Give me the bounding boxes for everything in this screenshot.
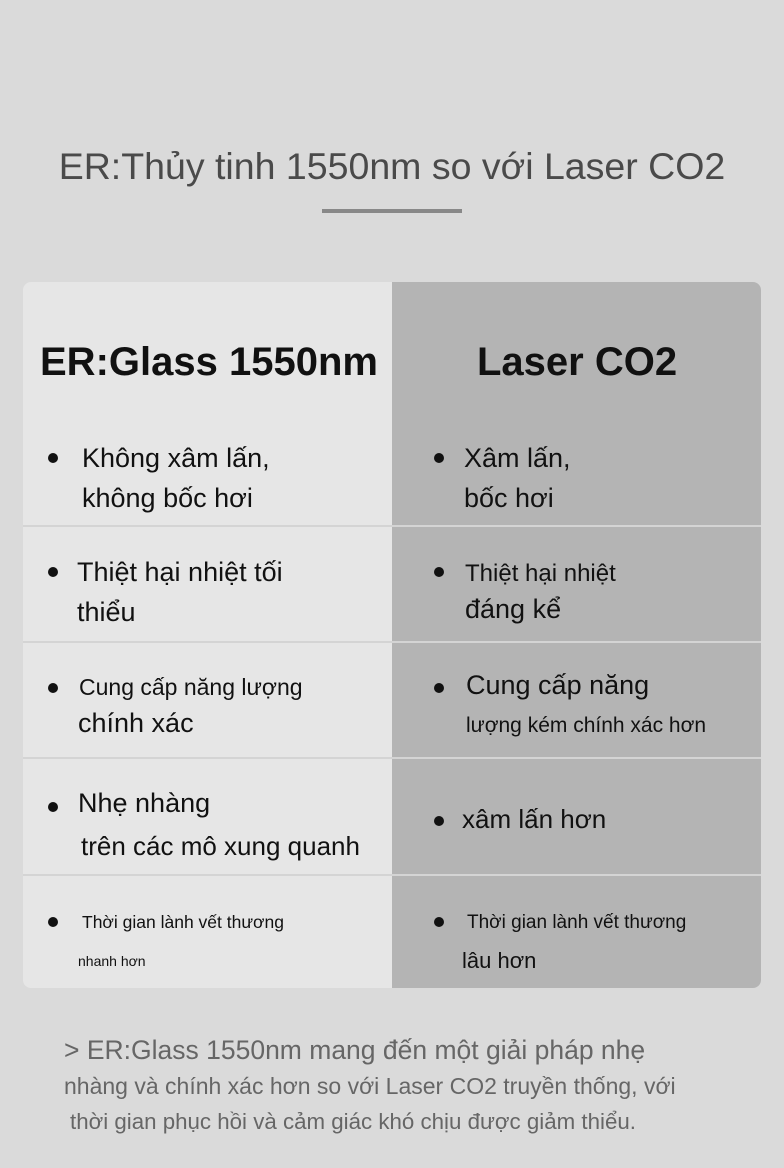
row 5 right: Thời gian lành vết thương: [467, 912, 686, 933]
title underline: [322, 209, 462, 213]
row 4 right: xâm lấn hơn: [462, 804, 606, 834]
header: Laser CO2: Laser CO2: [477, 340, 677, 384]
row 1 right: Xâm lấn,: [464, 443, 571, 473]
footer note: > ER:Glass 1550nm mang đến một giải pháp nhẹ: [64, 1035, 645, 1065]
row 2 right: đáng kể: [465, 594, 561, 624]
row 2 left: Thiệt hại nhiệt tối: [77, 557, 283, 587]
footer note: [64, 1035, 676, 1134]
title: ER:Thủy tinh 1550nm so với Laser CO2: [59, 145, 725, 187]
row 3 right: [434, 670, 706, 737]
row 3 right: lượng kém chính xác hơn: [466, 714, 706, 737]
row 2 left: thiểu: [77, 597, 136, 627]
row 1 left: [48, 443, 270, 513]
row 1 left: không bốc hơi: [82, 483, 253, 513]
row 3 left: Cung cấp năng lượng: [79, 674, 303, 700]
footer note: thời gian phục hồi và cảm giác khó chịu được giảm thiểu.: [70, 1109, 636, 1134]
row 4 left: [48, 788, 360, 861]
row 5 right: lâu hơn: [462, 948, 536, 973]
row 5 left: nhanh hơn: [78, 953, 146, 969]
row 2 right: Thiệt hại nhiệt: [465, 560, 616, 587]
row 4 left: trên các mô xung quanh: [81, 831, 360, 861]
row 3 left: chính xác: [78, 708, 194, 738]
footer note: nhàng và chính xác hơn so với Laser CO2 truyền thống, với: [64, 1073, 676, 1099]
row 4 left: Nhẹ nhàng: [78, 788, 210, 818]
row 2 right: [434, 560, 616, 624]
row 5 right: [434, 912, 686, 973]
row 1 right: bốc hơi: [464, 483, 554, 513]
row 3 right: Cung cấp năng: [466, 670, 649, 700]
comparison table: [23, 282, 761, 988]
row 1 left: Không xâm lấn,: [82, 443, 270, 473]
row 3 left: [48, 674, 303, 738]
row 5 left: Thời gian lành vết thương: [82, 912, 284, 932]
row 1 right: [434, 443, 571, 513]
row 2 left: [48, 557, 283, 627]
column: CO2 background: [392, 282, 761, 988]
header: ER:Glass: ER:Glass 1550nm: [40, 340, 378, 384]
row 5 left: [48, 912, 284, 969]
